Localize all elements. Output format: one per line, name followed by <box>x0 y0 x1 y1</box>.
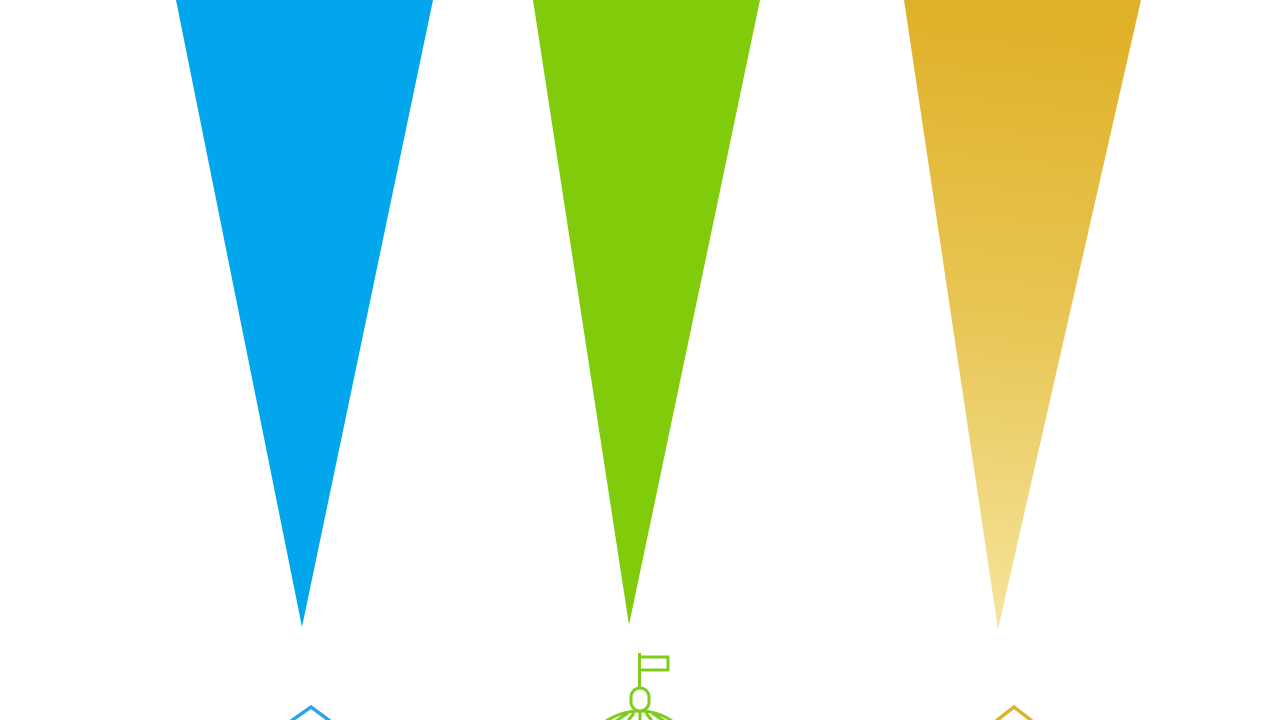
icon: green globe with flag <box>606 653 672 720</box>
globe dome <box>606 711 672 720</box>
flag <box>640 653 668 688</box>
icon: blue house roof <box>291 707 330 720</box>
blue triangle pointer <box>176 0 433 627</box>
icon: gold house roof <box>996 707 1032 720</box>
gold gradient triangle pointer <box>904 0 1141 629</box>
globe top knob <box>631 688 649 711</box>
green triangle pointer <box>533 0 760 625</box>
